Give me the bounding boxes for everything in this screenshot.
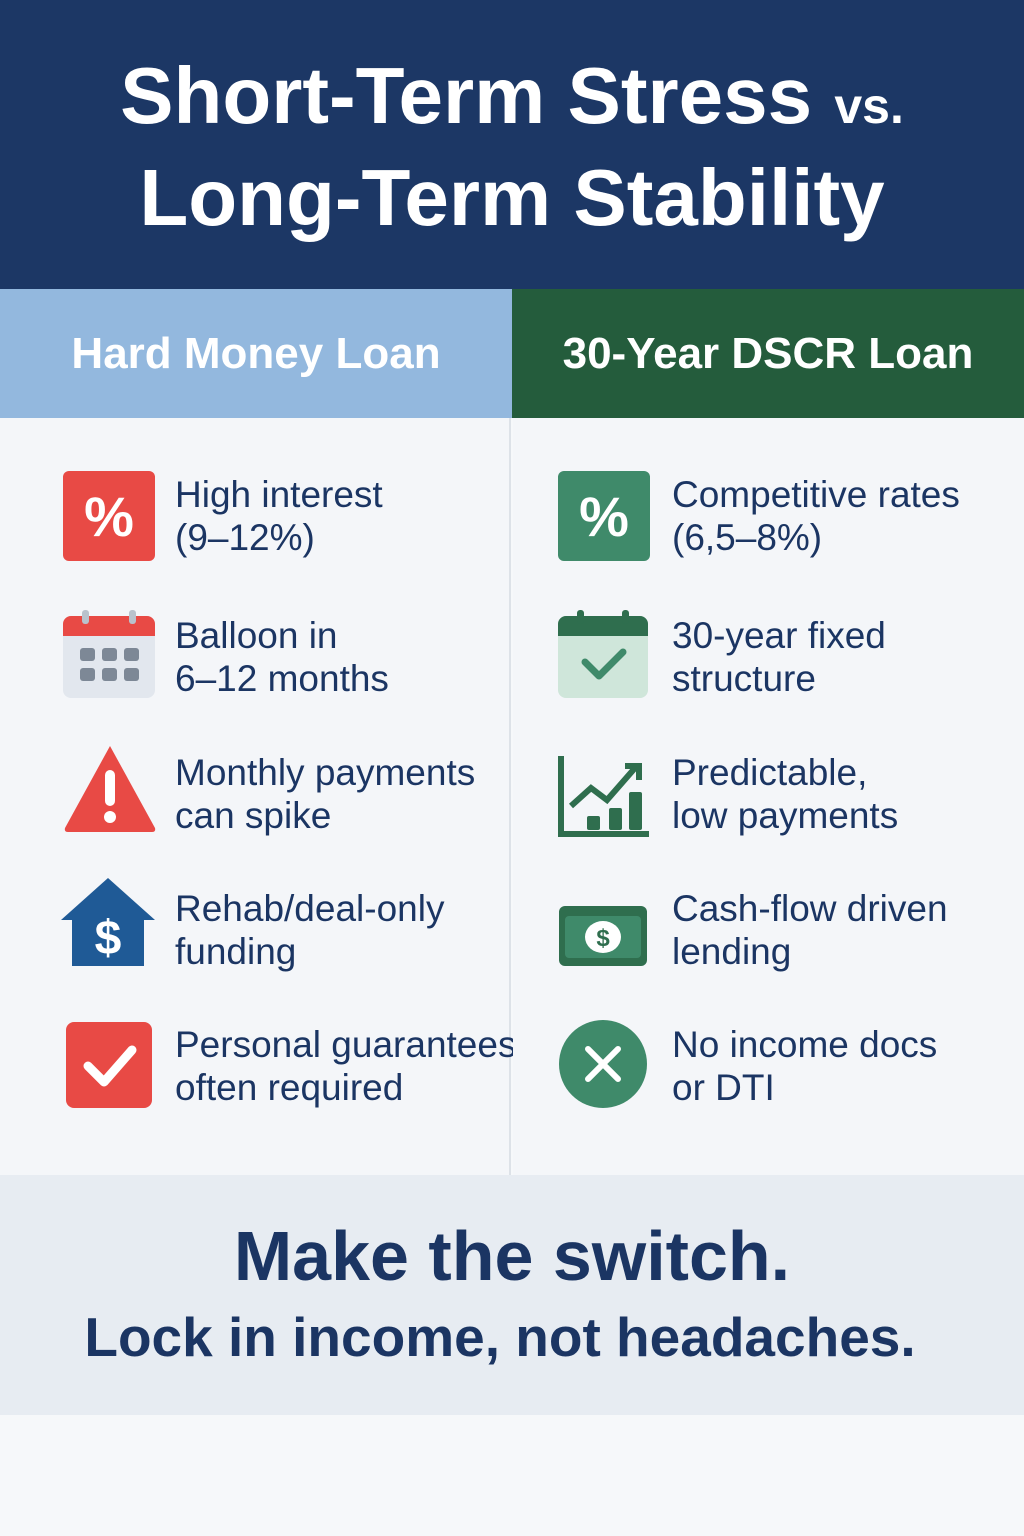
text: 30-year fixed: 30-year fixed — [672, 615, 886, 656]
text: monthly payments: Monthly payments — [175, 752, 475, 793]
text: balloon: Balloon in — [175, 615, 338, 656]
text: predictable — [672, 752, 898, 836]
text: predictable: low payments — [672, 795, 898, 836]
headline: make the switch: Make the switch. — [234, 1217, 790, 1295]
text: 30-year fixed — [672, 615, 886, 699]
text: 30-year fixed: structure — [672, 658, 816, 699]
text: competitive rates: (6,5–8%) — [672, 517, 822, 558]
text: cash-flow: lending — [672, 931, 791, 972]
icon: warning — [64, 746, 156, 832]
text: cash-flow — [672, 888, 948, 972]
icon: calendar — [63, 610, 155, 698]
text: rehab — [175, 888, 444, 972]
column header: DSCR — [512, 289, 1024, 418]
column header: hard money — [0, 289, 512, 418]
title: Long-Term Stability — [139, 153, 885, 242]
text: balloon — [175, 615, 389, 699]
column header: hard money: Hard Money Loan — [71, 329, 441, 378]
text: personal guarantees — [175, 1024, 516, 1108]
text: personal guarantees: Personal guarantees — [175, 1024, 516, 1065]
footer band — [0, 1175, 1024, 1415]
panel: hard money body — [0, 418, 511, 1175]
text: no income docs: No income docs — [672, 1024, 937, 1065]
column header: DSCR: 30-Year DSCR Loan — [563, 329, 973, 378]
icon: percent red: % — [84, 485, 134, 548]
text: predictable: Predictable, — [672, 752, 867, 793]
text: personal guarantees: often required — [175, 1067, 403, 1108]
text: rehab: funding — [175, 931, 296, 972]
icon: calendar check — [558, 610, 648, 698]
text: high interest: High interest — [175, 474, 383, 515]
icon: percent green — [558, 471, 650, 561]
text: high interest: (9–12%) — [175, 517, 315, 558]
icon: x circle — [559, 1020, 647, 1108]
icon: percent red — [63, 471, 155, 561]
panel: DSCR body — [513, 418, 1024, 1175]
subline: Lock in income, not headaches. — [84, 1306, 916, 1368]
text: competitive rates: Competitive rates — [672, 474, 960, 515]
text: monthly payments — [175, 752, 475, 836]
text: no income docs: or DTI — [672, 1067, 775, 1108]
header — [0, 0, 1024, 289]
icon: house dollar — [61, 878, 155, 966]
text: no income docs — [672, 1024, 937, 1108]
text: monthly payments: can spike — [175, 795, 331, 836]
text: balloon: 6–12 months — [175, 658, 389, 699]
text: competitive rates — [672, 474, 960, 558]
icon: cash: $ — [596, 925, 610, 952]
icon: check red — [66, 1022, 152, 1108]
icon: percent green: % — [579, 485, 629, 548]
icon: cash — [559, 906, 647, 966]
icon: chart — [558, 756, 649, 837]
title: Short-Term Stress vs. — [120, 51, 904, 140]
title — [120, 51, 904, 242]
text: cash-flow: Cash-flow driven — [672, 888, 948, 929]
text: high interest — [175, 474, 383, 558]
icon: house dollar: $ — [95, 912, 122, 965]
text: rehab: Rehab/deal-only — [175, 888, 444, 929]
